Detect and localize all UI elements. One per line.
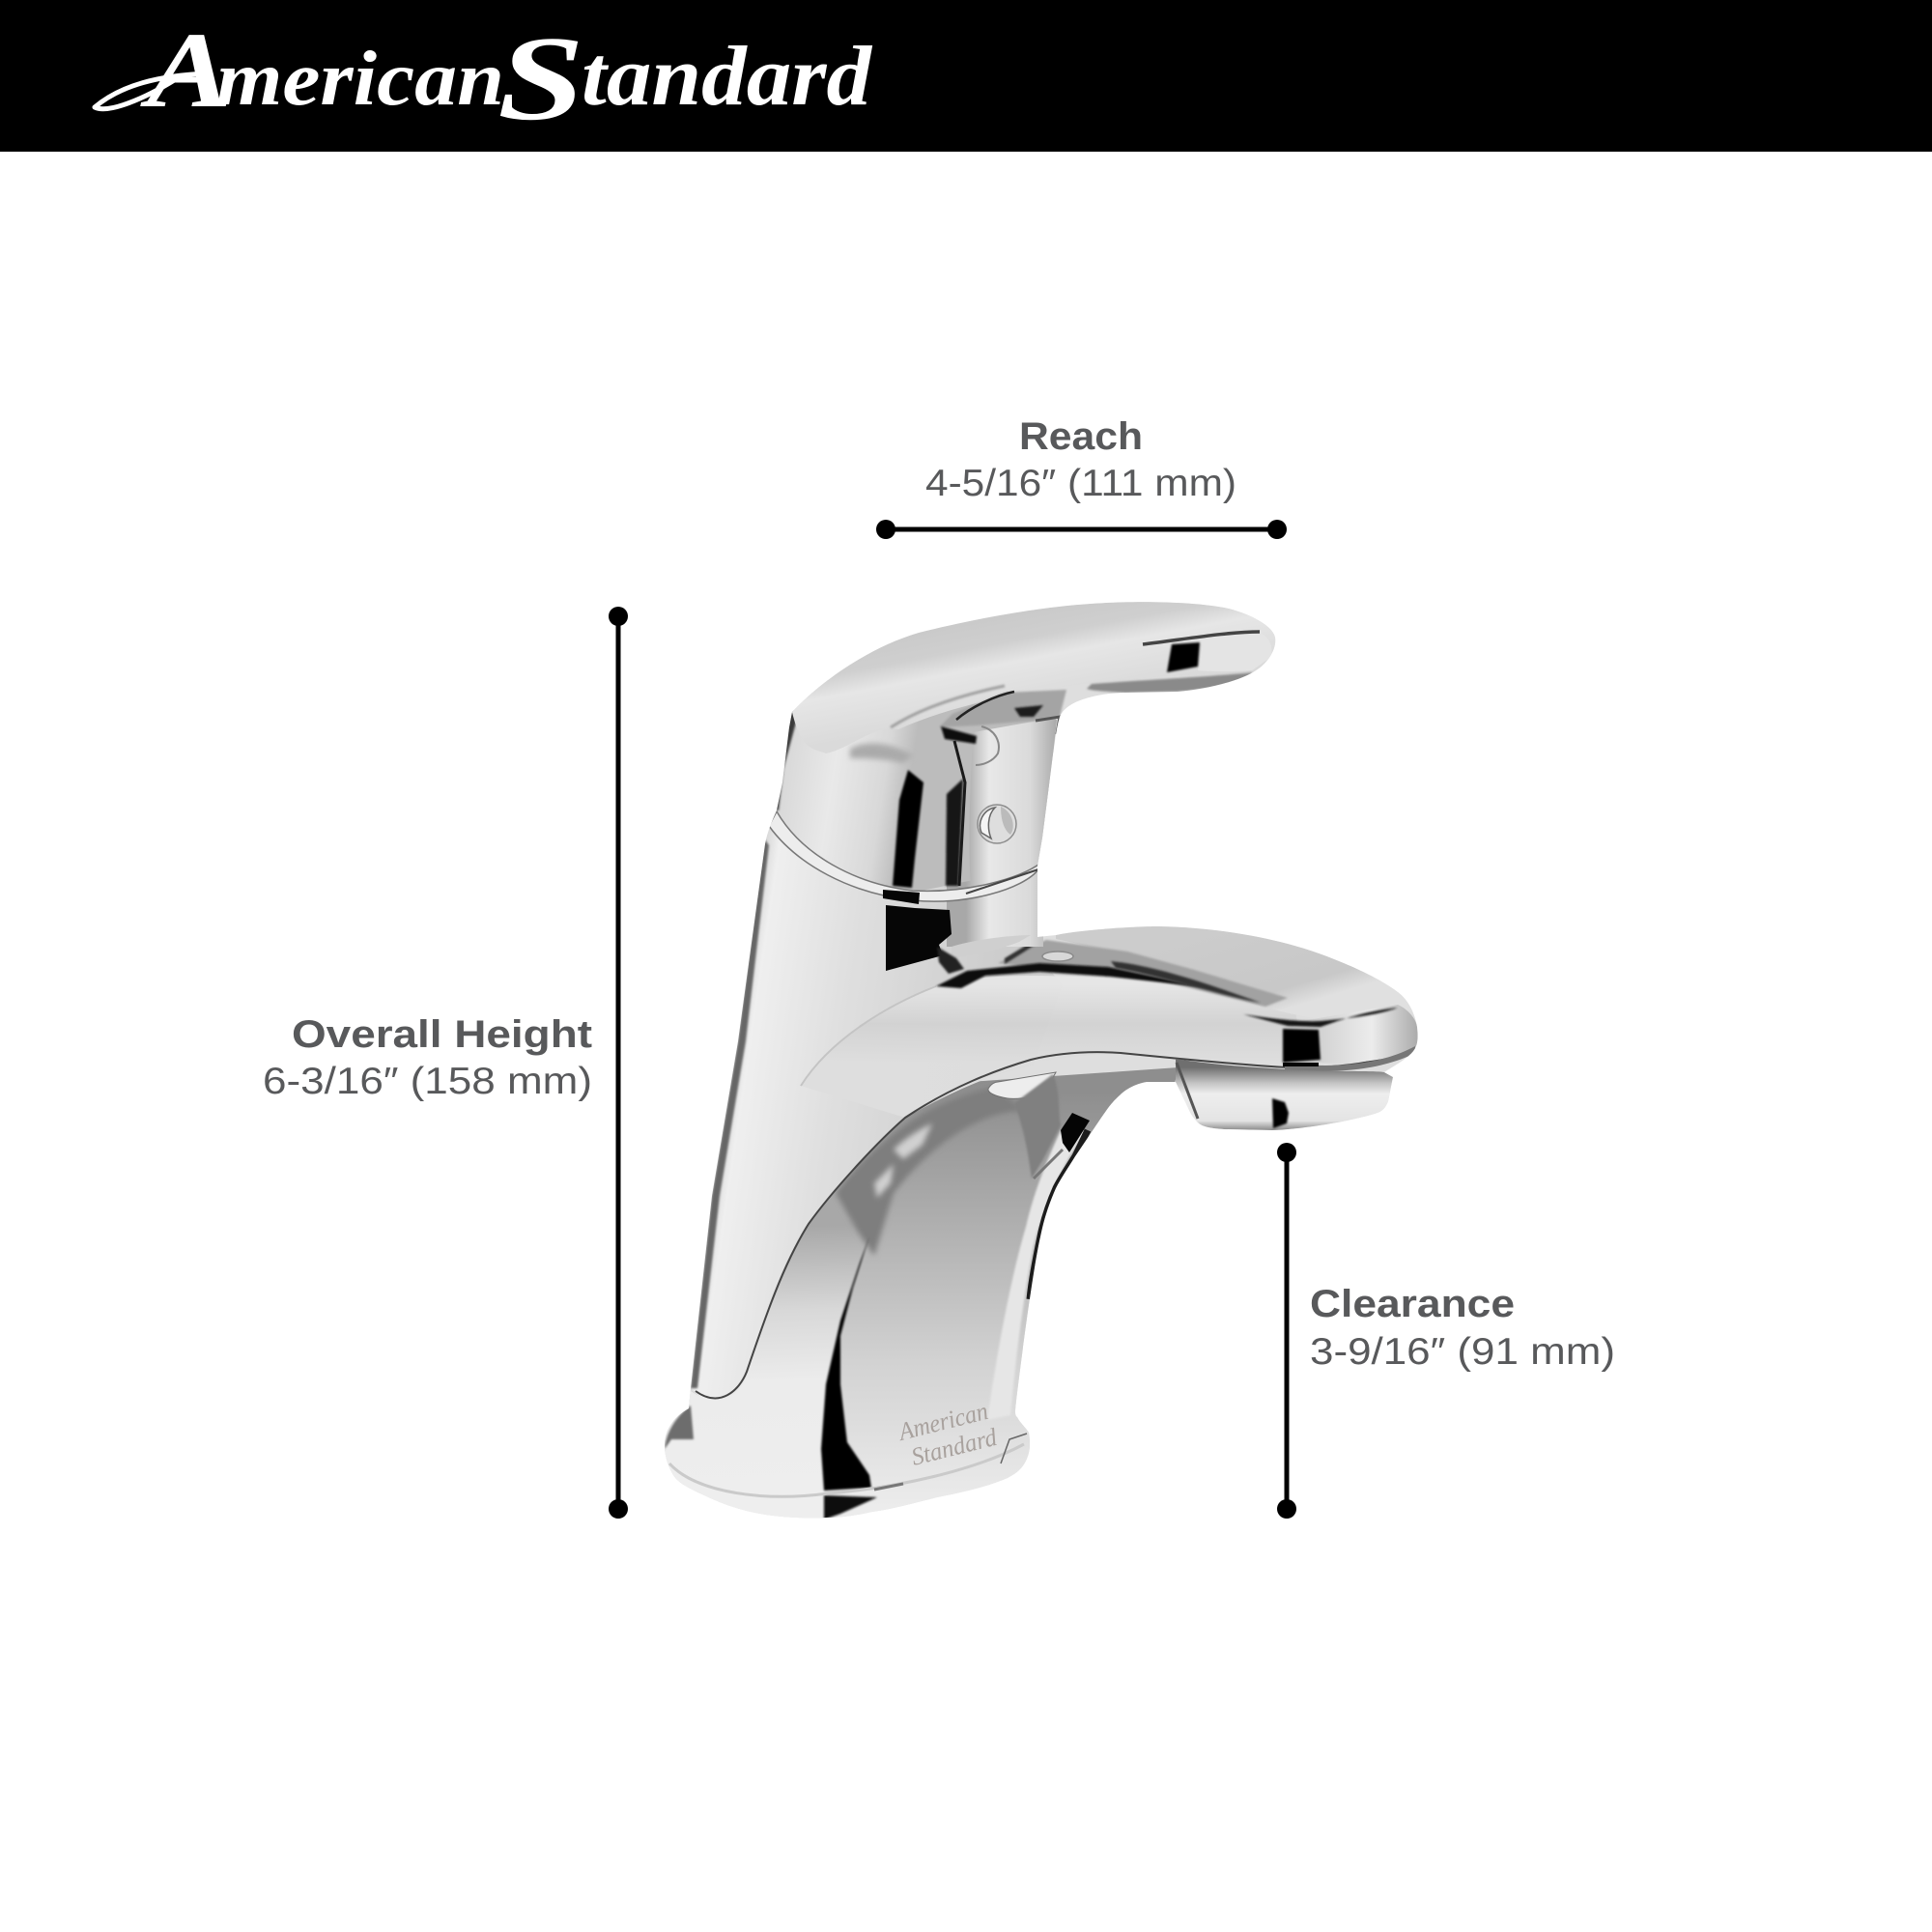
cap stem panel	[970, 720, 1057, 889]
reach dimension line	[876, 520, 1287, 539]
pedestal dark reflection	[821, 1236, 871, 1491]
body shadow line	[691, 838, 769, 1388]
reach label: 4-5/16″ (111 mm)	[925, 463, 1236, 504]
brand logo: S	[497, 13, 584, 146]
nozzle	[1176, 1059, 1393, 1130]
brand logo	[95, 11, 873, 146]
overall height label	[263, 1013, 592, 1102]
reach label: Reach	[1019, 415, 1143, 458]
spout top face	[1056, 926, 1372, 1014]
reach label	[925, 415, 1236, 504]
engraved logo	[900, 1407, 997, 1464]
brand logo: A	[140, 11, 232, 130]
spout tip	[1243, 1005, 1418, 1071]
clearance dimension line	[1277, 1143, 1296, 1519]
overall height dimension line	[609, 607, 628, 1519]
pedestal under spout	[657, 1067, 1179, 1546]
engraved logo: American	[895, 1397, 991, 1446]
brand logo: tandard	[582, 30, 873, 124]
handle cap	[778, 702, 1056, 891]
stem behind cap	[1036, 779, 1050, 874]
clearance label	[1310, 1283, 1615, 1373]
header bar	[0, 0, 1932, 152]
stem neck	[886, 874, 1043, 974]
spout crease	[801, 986, 936, 1086]
base rim shading	[665, 1406, 1027, 1496]
cap ring	[769, 811, 1041, 904]
cap shadows	[773, 712, 999, 888]
clearance label: 3-9/16″ (91 mm)	[1310, 1331, 1615, 1373]
handle lever	[792, 602, 1275, 753]
base reflection	[824, 1495, 877, 1520]
clearance label: Clearance	[1310, 1283, 1515, 1325]
brand logo: merican	[216, 37, 504, 122]
chrome faucet	[657, 594, 1430, 1546]
overall height label: 6-3/16″ (158 mm)	[263, 1061, 592, 1102]
screw	[978, 805, 1016, 843]
spout top reflections	[936, 939, 1288, 1007]
arch edge line	[696, 1046, 1415, 1398]
overall height label: Overall Height	[292, 1013, 592, 1056]
engraved logo: Standard	[908, 1423, 1001, 1471]
spout upper surface	[856, 976, 1296, 1115]
body column	[693, 829, 1055, 1399]
